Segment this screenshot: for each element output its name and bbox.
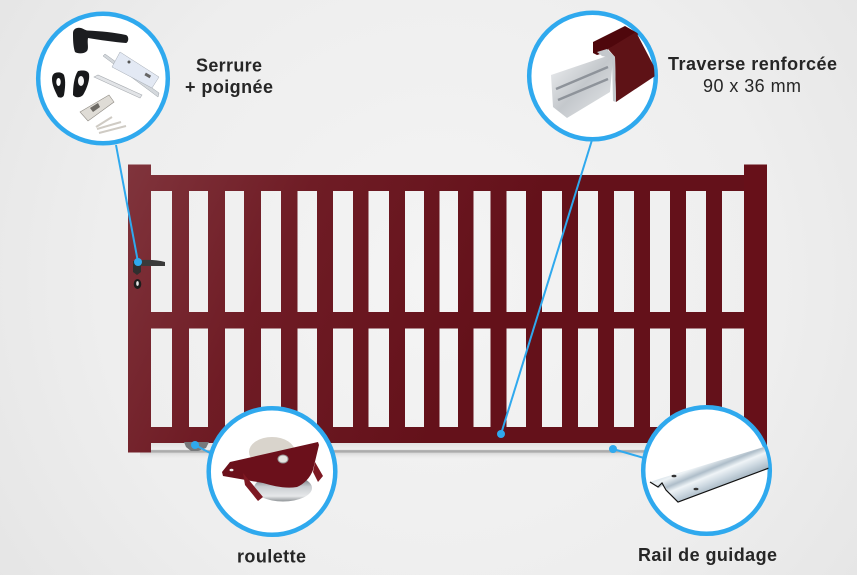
callout: roller (209, 408, 335, 535)
callout: lock and handle (38, 14, 168, 143)
door handle (133, 260, 165, 289)
label: reinforced crossbar: 90 x 36 mm (703, 76, 801, 96)
icon: roller flaps (243, 462, 323, 501)
roller under the gate (184, 442, 209, 451)
right post (744, 164, 767, 452)
guide rail on the ground (140, 443, 760, 459)
icon: escutcheon right (73, 70, 89, 97)
label: lock and handle: + poignée (185, 77, 273, 97)
label: lock and handle (185, 56, 273, 97)
gate (128, 164, 767, 452)
icon: crossbar profile (551, 26, 658, 118)
icon: wheel (254, 474, 312, 502)
circle frame (38, 14, 168, 143)
label: guide rail: Rail de guidage (638, 545, 777, 565)
connector: rail (609, 445, 644, 458)
icon: cylinder (80, 95, 114, 121)
circle frame (643, 407, 770, 534)
icon: wheel top (249, 437, 295, 467)
circle frame (529, 13, 656, 139)
icon: keys (96, 117, 126, 133)
icon: strike plate (94, 75, 142, 98)
gate rails (150, 175, 745, 443)
connector: lock (116, 145, 142, 266)
label: lock and handle: Serrure (196, 56, 262, 76)
icon: lock case (103, 52, 159, 97)
icon: handle (73, 28, 128, 53)
circle frame (209, 408, 335, 535)
icon: screw (278, 455, 288, 463)
callout: guide rail (643, 407, 770, 534)
label: roller: roulette (237, 546, 306, 566)
label: reinforced crossbar (668, 54, 837, 96)
left post (128, 164, 151, 452)
callout: reinforced crossbar (529, 13, 658, 139)
label: reinforced crossbar: Traverse renforcée (668, 54, 837, 74)
connector: roller (191, 441, 212, 454)
gate slats (172, 190, 722, 428)
icon: rail profile (650, 446, 769, 502)
icon: escutcheon left (52, 72, 65, 98)
icon: roller plate (222, 442, 319, 488)
connector: crossbar (497, 140, 592, 438)
